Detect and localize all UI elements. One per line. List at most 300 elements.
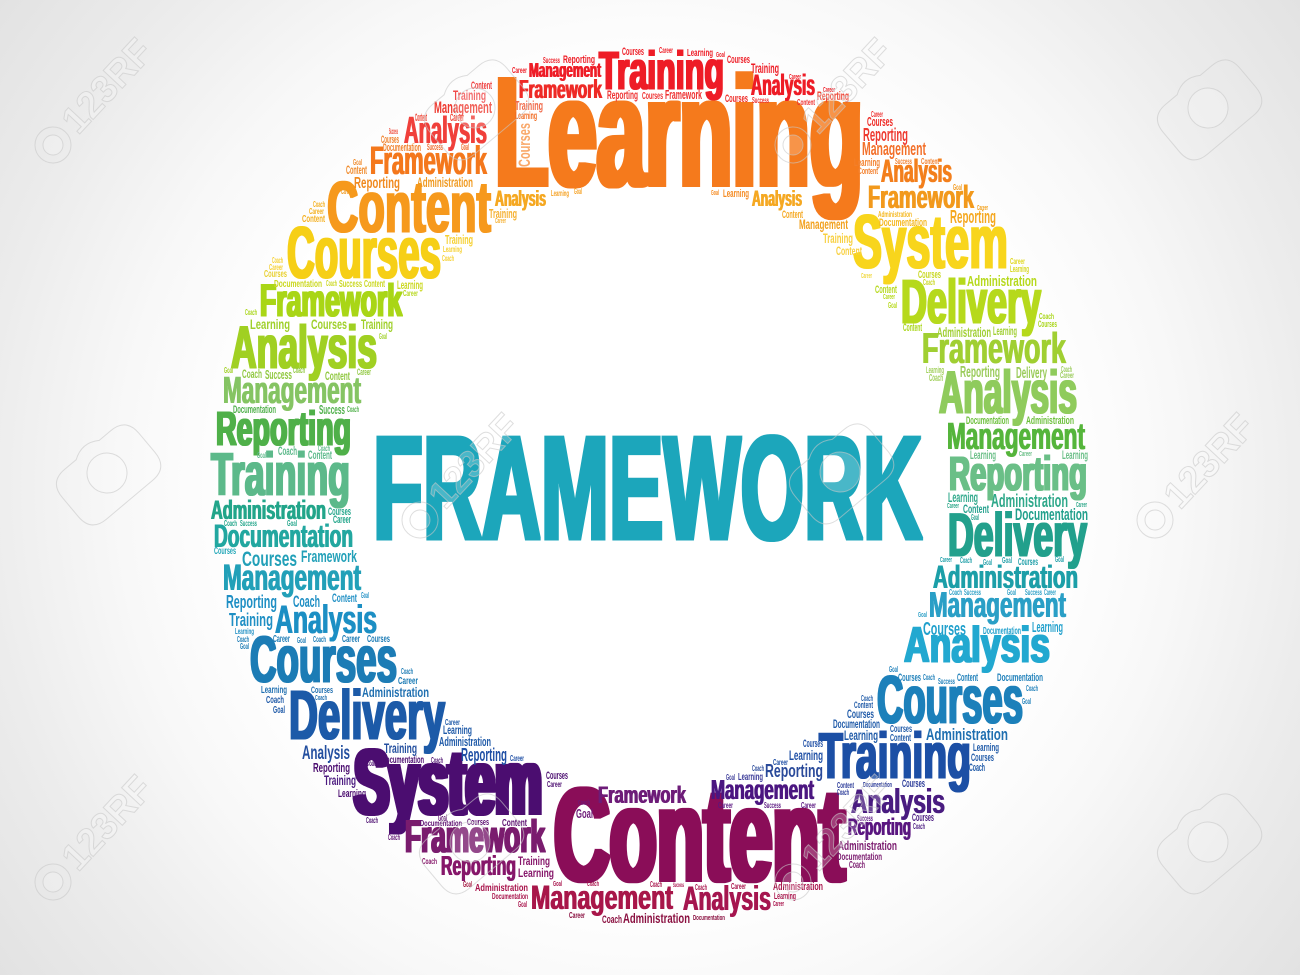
small words: top centre and right sector: Reporting — [607, 88, 638, 102]
small words: top centre and right sector: Success — [895, 157, 912, 166]
small words: right middle sector: Administration — [1026, 415, 1074, 427]
small words: left middle sector: Content — [332, 591, 357, 605]
small words: right middle sector: Documentation — [997, 672, 1043, 684]
small words: bottom left sector: Administration — [439, 734, 491, 749]
word: Analysis left: Analysis — [231, 314, 377, 381]
small words: bottom left sector: Documentation — [382, 755, 424, 766]
word: Management left lower: Management — [223, 557, 361, 598]
word: Analysis left lower: Analysis — [275, 598, 377, 642]
small words: top centre and right sector: Career — [977, 205, 988, 212]
word: Analysis right upper: Analysis — [939, 359, 1077, 426]
small words: right middle sector: Goal — [971, 513, 979, 522]
small words: left middle sector: Career — [357, 367, 371, 377]
small words: top centre and right sector: Success — [752, 96, 769, 105]
small words: top centre and right sector: Career — [883, 294, 895, 301]
small words: top centre and right sector: Courses — [725, 93, 748, 105]
small words: bottom right sector: Success — [764, 801, 781, 810]
small words: top left sector: Learning — [551, 189, 569, 198]
small words: right middle sector: Goal — [889, 665, 898, 674]
small words: right middle sector: Delivery — [1016, 365, 1047, 382]
small words: top centre and right sector: Career — [659, 46, 673, 55]
watermark middle centre left — [392, 406, 528, 547]
word: Management right lower: Management — [929, 584, 1066, 625]
small words: left middle sector: Career — [273, 634, 290, 645]
small words: bottom left sector: Coach — [422, 857, 437, 866]
small words: top centre and right sector — [512, 46, 1057, 340]
word: Analysis right lower: Analysis — [904, 617, 1050, 673]
small words: bottom right sector: Documentation — [837, 852, 882, 863]
small words: top centre and right sector: Documentation — [879, 217, 927, 229]
small words: top centre and right sector: Content — [858, 166, 878, 176]
small words: top left sector: Coach — [326, 279, 337, 288]
small words: top left sector: Administration — [417, 174, 473, 190]
small words: top left sector: Coach — [313, 200, 325, 209]
small words: left middle sector: Coach — [293, 365, 305, 375]
large words — [211, 41, 1087, 862]
small words: left middle sector: Content — [308, 448, 332, 462]
small words: right middle sector: Documentation — [966, 415, 1009, 427]
small words: bottom left sector: Career — [445, 718, 460, 727]
small words: bottom left sector — [261, 667, 622, 926]
small words: left middle sector: Career — [342, 634, 360, 645]
small words: bottom right sector: Learning — [789, 747, 823, 763]
small words: right middle sector: Learning — [1032, 619, 1063, 636]
small words: top centre and right sector: Learning — [515, 111, 537, 122]
small words: top left sector: Content — [364, 279, 385, 290]
small words: right middle sector: Goal — [918, 612, 927, 619]
small words: bottom right sector: Success — [673, 883, 684, 889]
word: Analysis top left: Analysis — [404, 110, 487, 152]
small words: right middle sector: Goal — [1055, 555, 1064, 564]
watermark bottom centre right: 123RF — [794, 768, 901, 879]
small words: top left sector: Documentation — [383, 142, 421, 154]
small words: top centre and right sector: Coach — [923, 278, 935, 287]
small words: top left sector: Career — [341, 187, 352, 196]
small words: left middle sector: Learning — [235, 627, 254, 636]
small words: top left sector: Learning — [250, 316, 290, 332]
small words: top centre and right sector: Learning — [993, 324, 1017, 338]
small words: right middle sector: Career — [947, 503, 959, 510]
small words: bottom right sector: Career — [718, 801, 733, 810]
small words: top centre and right sector: Content — [836, 244, 862, 258]
small words: left middle sector: Coach — [242, 367, 262, 381]
small words: right middle sector: Learning — [970, 448, 996, 462]
small words: bottom left sector: Coach — [578, 800, 590, 807]
small words: top centre and right sector: Goal — [888, 301, 897, 310]
small words: bottom right sector: Learning — [738, 772, 763, 783]
small words: bottom left sector: Goal — [518, 900, 527, 909]
small words: top left sector: Career — [495, 218, 506, 225]
small words: bottom right sector: Coach — [969, 762, 985, 774]
small words: right middle sector: Coach — [949, 588, 962, 597]
small words: right middle sector: Content — [957, 672, 978, 684]
small words: top centre and right sector: Management — [799, 216, 848, 232]
small words: bottom right sector: Coach — [650, 880, 662, 889]
watermark bottom left — [25, 768, 161, 909]
small words: top left sector: Courses — [311, 316, 347, 332]
small words: top left sector: Training — [445, 232, 473, 247]
small words: top left sector: Content — [415, 112, 427, 124]
word: Management lower: Management — [711, 774, 814, 805]
small words: top centre and right sector: Reporting — [863, 125, 908, 145]
small words: bottom left sector: Career — [510, 754, 524, 763]
small words: top centre and right sector: Courses — [867, 114, 893, 129]
word: Delivery lower left: Delivery — [289, 676, 445, 754]
small words: top centre and right sector: Career — [789, 74, 801, 81]
small words: top centre and right sector: Content — [797, 98, 815, 107]
small words: top centre and right sector: Courses — [515, 123, 534, 167]
small words: left middle sector: Courses — [367, 634, 390, 645]
word: Framework top: Framework — [519, 74, 602, 104]
small words: left middle sector: Goal — [240, 642, 249, 651]
small words: top centre and right sector: Courses — [727, 54, 750, 66]
small words: top left sector: Training — [361, 316, 393, 332]
word cloud ring — [211, 41, 1088, 926]
small words: bottom left sector: Career — [569, 911, 585, 920]
watermark bottom left: 123RF — [54, 768, 161, 879]
small words: left middle sector: Goal — [297, 636, 306, 645]
small words: bottom left sector: Coach — [401, 667, 413, 676]
small words: top left sector: Documentation — [274, 279, 322, 290]
small words: bottom left sector: Career — [398, 676, 418, 687]
small words: bottom right sector: Coach — [913, 822, 925, 831]
small words: top left sector: Career — [450, 112, 464, 124]
small words: left middle sector: Coach — [293, 592, 320, 611]
small words: bottom right sector: Content — [890, 733, 911, 744]
small words: top left sector: Content — [346, 163, 367, 177]
small words: bottom right sector: Learning — [844, 727, 878, 743]
small words: top centre and right sector: Learning — [1010, 264, 1029, 274]
word: Reporting left: Reporting — [216, 403, 351, 456]
small words: left middle sector: Goal — [361, 591, 369, 600]
small words: bottom right sector: Goal — [726, 773, 735, 782]
small words: bottom right sector: Reporting — [765, 761, 823, 781]
word: Courses lower left: Courses — [250, 622, 397, 696]
small words: bottom right sector: Documentation — [863, 782, 892, 789]
small words: bottom right sector: Courses — [971, 752, 994, 764]
small words: bottom right sector: Coach — [861, 694, 873, 703]
small words: bottom right sector: Learning — [973, 742, 999, 754]
small words: top centre and right sector: Goal — [716, 52, 725, 59]
small words: top centre and right sector: Administration — [937, 324, 991, 340]
small words: bottom right sector: Career — [731, 882, 746, 891]
small words: top left sector: Learning — [397, 278, 423, 292]
watermark stamp middle centre — [779, 413, 901, 531]
small words: bottom left sector: Learning — [443, 723, 472, 737]
word: Framework upper left: Framework — [370, 139, 487, 183]
small words: left middle sector — [214, 365, 390, 651]
word: Courses yellow: Courses — [287, 213, 441, 294]
small words: bottom right sector: Coach — [695, 883, 707, 892]
small words: right middle sector: Learning — [1062, 448, 1088, 462]
small words: right middle sector: Goal — [1002, 556, 1012, 565]
small words: bottom left sector: Administration — [475, 883, 528, 894]
small words: right middle sector: Coach — [1061, 365, 1072, 374]
small words: bottom right sector: Coach — [837, 788, 849, 797]
word: Courses lower right: Courses — [877, 662, 1023, 738]
small words: right middle sector: Coach — [960, 556, 972, 565]
small words: bottom right sector: Documentation — [693, 915, 725, 922]
small words: bottom left sector: Training — [518, 854, 550, 868]
word: Management right: Management — [947, 416, 1085, 458]
small words: top left sector: Courses — [381, 134, 399, 146]
small words: left middle sector: Success — [265, 367, 292, 382]
word: Delivery right: Delivery — [901, 268, 1041, 337]
small words: bottom right sector: Administration — [623, 910, 690, 926]
small words: right middle sector: Career — [1044, 588, 1056, 597]
small words: bottom right sector: Courses — [803, 738, 823, 750]
small words: left middle sector: Coach — [347, 405, 359, 414]
word: Analysis top right: Analysis — [751, 69, 815, 102]
word: Management bottom: Management — [531, 879, 673, 917]
small words: right middle sector: Career — [1060, 371, 1074, 380]
word: System bottom: System — [354, 730, 542, 834]
watermark top centre right — [765, 31, 901, 172]
small words: top centre and right sector: Career — [1010, 257, 1025, 266]
small words: left middle sector: Coach — [237, 635, 249, 644]
small words: left middle sector: Training — [229, 610, 273, 630]
small words: bottom left sector: Career — [547, 780, 562, 789]
small words: left middle sector: Goal — [224, 366, 233, 375]
small words: right middle sector: Courses — [923, 619, 966, 639]
small words: top left sector: Coach — [245, 308, 257, 317]
small words: top centre and right sector: Administration — [878, 210, 912, 219]
small words: top centre and right sector: Content — [875, 284, 897, 296]
small words: top centre and right sector: Training — [823, 230, 853, 246]
small words: top left sector: Career — [403, 289, 418, 298]
small words: top centre and right sector: Career — [823, 87, 835, 94]
small words: top centre and right sector: Training — [515, 98, 543, 113]
small words: top left sector: Training — [453, 87, 486, 103]
small words: left middle sector: Courses — [242, 548, 297, 571]
small words: top left sector: Training — [489, 206, 517, 221]
small words: right middle sector: Courses — [898, 672, 921, 684]
small words: top centre and right sector: Training — [751, 60, 779, 76]
small words: top centre and right sector: Goal — [953, 183, 962, 192]
small words: bottom left sector: Analysis — [302, 743, 350, 764]
word: Training top: Training — [599, 41, 724, 101]
small words: bottom right sector: Career — [773, 758, 788, 767]
small words: top centre and right sector: Courses — [1038, 319, 1057, 329]
small words: right middle sector: Success — [964, 588, 981, 597]
small words: bottom right sector: Career — [773, 901, 784, 908]
small words: bottom left sector: Goal — [463, 880, 472, 889]
small words: top left sector: Coach — [442, 254, 454, 263]
small words: bottom left sector: Documentation — [492, 892, 528, 901]
small words: top centre and right sector: Success — [543, 56, 560, 65]
small words: left middle sector: Framework — [301, 547, 357, 566]
word: Delivery right middle: Delivery — [948, 501, 1087, 569]
small words: bottom left sector: Learning — [338, 788, 366, 800]
small words: top centre and right sector: Coach — [1039, 312, 1054, 321]
small words: top left sector: Success — [389, 127, 398, 136]
small words: bottom right sector: Courses — [912, 812, 934, 824]
watermark bottom centre right — [765, 768, 901, 909]
small words: bottom left sector: Learning — [261, 685, 287, 696]
small words: top left sector: Management — [434, 98, 492, 117]
small words: top left sector: Content — [471, 80, 492, 92]
medium words — [211, 60, 1085, 918]
small words: left middle sector: Coach — [318, 444, 330, 453]
small words: bottom right sector: Learning — [774, 891, 796, 901]
small words: bottom left sector: Reporting — [461, 745, 507, 765]
watermark stamp bottom right — [1147, 783, 1269, 901]
small words: right middle sector: Goal — [1007, 588, 1016, 597]
word: Reporting right middle: Reporting — [949, 448, 1087, 501]
small words: bottom left sector: Learning — [518, 866, 554, 880]
small words: bottom right sector: Administration — [838, 838, 897, 853]
word: Analysis inner top left: Analysis — [495, 186, 546, 211]
word: Framework bottom left: Framework — [405, 811, 546, 862]
small words: top centre and right sector: Reporting — [563, 54, 595, 66]
small words: bottom left sector: Coach — [587, 881, 599, 888]
small words: top left sector: Career — [269, 263, 283, 272]
small words: top centre and right sector: Reporting — [950, 207, 996, 227]
small words: bottom left sector: Coach — [602, 914, 622, 926]
word: Reporting lower right: Reporting — [848, 814, 911, 841]
small words: left middle sector: Courses — [328, 506, 351, 518]
word: Training lower right: Training — [819, 719, 971, 792]
small words: right middle sector: Success — [1025, 588, 1042, 597]
watermark stamp middle left — [46, 414, 168, 532]
small words: top centre and right sector: Career — [512, 66, 527, 75]
small words: right middle sector: Coach — [1026, 684, 1038, 693]
small words: bottom right sector: Coach — [849, 860, 865, 871]
word: Framework left: Framework — [260, 275, 403, 326]
small words: top centre and right sector: Framework — [665, 87, 702, 102]
small words: top left sector: Career — [309, 207, 324, 216]
small words: top centre and right sector: Reporting — [817, 89, 849, 103]
word: Framework right upper: Framework — [922, 324, 1066, 373]
word: Analysis lower right: Analysis — [851, 783, 945, 821]
small words: top left sector: Content — [302, 214, 325, 225]
small words: bottom right sector: Content — [837, 781, 854, 790]
small words: top centre and right sector: Content — [782, 209, 803, 221]
small words: right middle sector: Coach — [923, 673, 935, 682]
largest words — [354, 45, 863, 910]
small words: bottom left sector: Goal — [438, 813, 447, 823]
watermark stamp top right — [1147, 49, 1269, 167]
word: Documentation left: Documentation — [214, 518, 353, 554]
small words: left middle sector: Coach — [313, 635, 326, 644]
small words: right middle sector: Documentation — [983, 626, 1021, 637]
small words: right middle sector: Career — [1019, 451, 1032, 458]
word: Analysis inner top right: Analysis — [752, 186, 802, 211]
small words: left middle sector: Content — [325, 369, 350, 383]
small words: bottom left sector: Content — [502, 818, 527, 829]
small words: right middle sector: Documentation — [1015, 505, 1088, 524]
small words: top centre and right sector: Courses — [918, 269, 941, 281]
small words: right middle sector: Career — [940, 557, 952, 564]
small words: top centre and right sector: Administration — [967, 273, 1037, 290]
small words: right middle sector: Learning — [948, 489, 978, 505]
small words: top centre and right sector: Management — [862, 139, 926, 159]
watermark middle right — [1127, 406, 1263, 547]
word: Framework bottom: Framework — [598, 782, 686, 809]
small words: bottom right sector: Career — [801, 801, 816, 810]
small words: top centre and right sector: Courses — [642, 91, 663, 102]
word: Analysis upper right: Analysis — [881, 153, 952, 189]
small words: right middle sector: Goal — [983, 558, 992, 567]
small words: right middle sector: Content — [963, 502, 989, 516]
small words: bottom left sector: Goal — [273, 705, 285, 716]
small words: top left sector: Goal — [461, 142, 469, 152]
word: Administration right: Administration — [933, 559, 1078, 595]
watermark top centre right: 123RF — [794, 31, 901, 142]
small words: bottom left sector: Documentation — [420, 819, 462, 828]
small words: right middle sector: Learning — [926, 365, 944, 375]
small words: top centre and right sector: Content — [921, 157, 939, 166]
watermark middle centre left: 123RF — [421, 406, 528, 517]
small words: bottom right sector: Success — [857, 814, 873, 823]
small words: right middle sector: Coach — [929, 373, 943, 384]
watermark stamp top centre — [414, 49, 536, 167]
small words: left middle sector: Coach — [224, 519, 237, 528]
small words: bottom right sector: Administration — [773, 881, 823, 893]
word: Analysis bottom: Analysis — [683, 880, 771, 918]
word: System right: System — [853, 200, 1008, 285]
small words: bottom left sector: Goal — [576, 806, 593, 821]
small words: bottom right sector: Coach — [752, 764, 764, 773]
small words: top left sector: Goal — [353, 158, 362, 167]
small words: left middle sector: Success — [240, 519, 257, 528]
small words: bottom left sector: Goal — [553, 881, 562, 888]
small words: left middle sector: Coach — [278, 444, 297, 458]
word: Training left: Training — [211, 441, 350, 508]
small words: bottom left sector: Courses — [311, 685, 333, 695]
small words: right middle sector: Courses — [1018, 557, 1038, 568]
small words: bottom left sector: Training — [324, 772, 356, 788]
small words: top left sector: Success — [427, 142, 443, 152]
word cloud ring: Goal — [574, 187, 582, 196]
small words: bottom left sector: Courses — [546, 770, 568, 782]
small words: bottom left sector: Coach — [366, 759, 379, 768]
word: Reporting bottom left: Reporting — [441, 850, 516, 881]
small words: bottom left sector: Coach — [388, 833, 400, 842]
small words: left middle sector: Reporting — [226, 592, 277, 612]
small words: top left sector: Reporting — [354, 175, 400, 192]
small words: top centre and right sector: Goal — [711, 190, 719, 197]
small words: right middle sector: Career — [1076, 502, 1087, 509]
small words: bottom right sector: Content — [854, 700, 873, 710]
small words: left middle sector: Success — [319, 402, 345, 417]
small words: bottom left sector: Coach — [315, 695, 327, 702]
small words: top centre and right sector: Learning — [687, 48, 713, 59]
small words: right middle sector: Goal — [1022, 697, 1031, 706]
small words: right middle sector — [889, 364, 1088, 706]
small words: bottom right sector: Courses — [847, 707, 874, 721]
small words: bottom left sector: Coach — [266, 695, 284, 706]
small words: top centre and right sector: Content — [903, 322, 922, 334]
watermark top left — [25, 31, 161, 172]
small words: bottom left sector: Reporting — [313, 760, 350, 775]
small words: bottom left sector: Coach — [431, 756, 443, 765]
small words: right middle sector: Administration — [991, 491, 1068, 511]
small words: right middle sector: Reporting — [960, 364, 1000, 381]
small words: bottom right sector: Courses — [890, 724, 912, 735]
small words: top centre and right sector: Learning — [723, 188, 749, 200]
watermark middle right: 123RF — [1156, 406, 1263, 517]
small words: top centre and right sector: Learning — [854, 157, 880, 169]
small words: top left sector: Courses — [264, 269, 287, 280]
word: Management left: Management — [223, 370, 361, 412]
word: Content bottom: Content — [554, 761, 845, 910]
small words: top centre and right sector: Career — [861, 273, 872, 280]
word: Content top left: Content — [327, 168, 491, 248]
small words: bottom left sector: Coach — [366, 816, 378, 825]
small words: top left sector: Success — [339, 279, 362, 290]
small words: bottom left sector: Training — [384, 740, 417, 756]
